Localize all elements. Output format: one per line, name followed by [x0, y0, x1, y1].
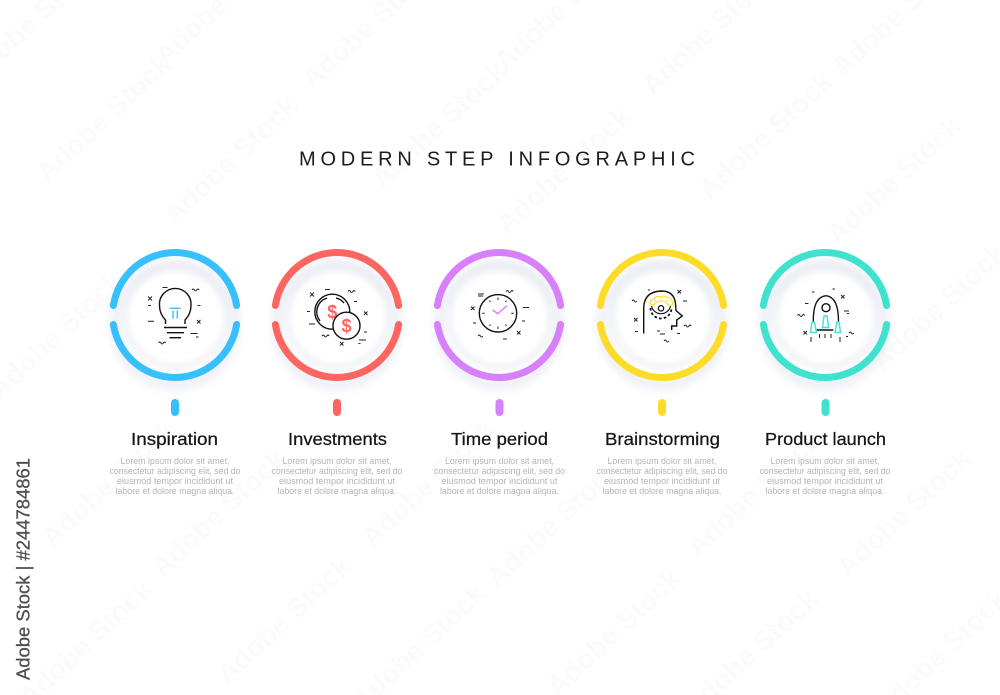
watermark pattern: Adobe Stock — [35, 413, 182, 553]
heading: Investments — [288, 429, 387, 449]
step 2: investments — [272, 253, 402, 496]
description: Lorem ipsum dolor sit amet, — [445, 455, 554, 466]
icon: head with gear — [632, 290, 691, 342]
description: labore et dolore magna aliqua. — [278, 485, 396, 496]
description: labore et dolore magna aliqua. — [116, 485, 234, 496]
heading: Inspiration — [131, 429, 218, 449]
description: eiusmod tempor incididunt ut — [442, 475, 558, 486]
stock id label: Adobe Stock | #244784861 — [12, 458, 34, 680]
step 4: brainstorming — [596, 253, 728, 496]
ring: yellow — [600, 253, 724, 377]
icon: light bulb — [148, 288, 200, 344]
description: consectetur adipiscing elit, sed do — [760, 465, 890, 476]
connector pill — [822, 399, 830, 416]
heading: Time period — [451, 429, 548, 449]
heading: Product launch — [765, 429, 886, 449]
dollar sign: large coin: $ — [327, 302, 337, 322]
heading: Brainstorming — [605, 429, 720, 449]
ring shadow — [277, 265, 397, 385]
description: labore et dolore magna aliqua. — [602, 485, 722, 496]
watermark pattern: Adobe Stock — [830, 443, 977, 583]
description: Lorem ipsum dolor sit amet, — [120, 455, 230, 466]
watermark pattern: Adobe Stock — [480, 453, 627, 593]
ring: purple — [437, 253, 561, 377]
description: labore et dolore magna aliqua. — [766, 485, 884, 496]
description: consectetur adipiscing elit, sed do — [272, 465, 402, 476]
ring: teal — [763, 253, 887, 377]
description: consectetur adipiscing elit, sed do — [110, 465, 240, 476]
gear — [652, 306, 670, 314]
title: MODERN STEP INFOGRAPHIC — [299, 148, 695, 170]
description: eiusmod tempor incididunt ut — [117, 475, 233, 486]
connector pill — [496, 399, 504, 416]
watermark pattern: Adobe Stock — [692, 65, 839, 205]
ring: red — [275, 253, 399, 377]
description: Lorem ipsum dolor sit amet, — [770, 455, 880, 466]
description — [596, 455, 728, 496]
icon: clock — [471, 290, 529, 339]
brain — [650, 296, 673, 305]
description: Lorem ipsum dolor sit amet, — [608, 455, 716, 466]
step 1: inspiration — [110, 253, 240, 496]
watermark pattern: Adobe Stock — [210, 550, 357, 690]
step 3: time period — [434, 253, 565, 496]
description: labore et dolore magna aliqua. — [440, 485, 559, 496]
watermark pattern: Adobe Stock — [30, 48, 177, 188]
description: eiusmod tempor incididunt ut — [279, 475, 395, 486]
step 5: product launch — [760, 253, 890, 496]
watermark pattern: Adobe Stock — [157, 90, 304, 230]
description — [110, 455, 240, 496]
dollar sign: small coin: $ — [341, 316, 352, 336]
watermark pattern: Adobe Stock — [490, 100, 637, 240]
icon: rocket — [798, 289, 854, 342]
watermark pattern: Adobe Stock — [680, 423, 827, 563]
description: eiusmod tempor incididunt ut — [604, 475, 720, 486]
ring shadow — [439, 265, 559, 385]
description: Lorem ipsum dolor sit amet, — [282, 455, 392, 466]
description — [434, 455, 565, 496]
ring shadow — [765, 265, 885, 385]
ring shadow — [115, 265, 235, 385]
connector pill — [171, 399, 179, 416]
ring shadow — [602, 265, 722, 385]
connector pill — [333, 399, 341, 416]
watermark pattern: Adobe Stock — [145, 443, 292, 583]
watermark pattern: Adobe Stock — [365, 55, 512, 195]
flames — [810, 316, 840, 332]
description: consectetur adipiscing elit, sed do — [596, 465, 728, 476]
description: consectetur adipiscing elit, sed do — [434, 465, 565, 476]
description — [272, 455, 402, 496]
icon: coins — [307, 290, 368, 346]
description: eiusmod tempor incididunt ut — [767, 475, 883, 486]
watermark pattern: Adobe Stock — [820, 110, 967, 250]
clock hands — [493, 306, 507, 314]
description — [760, 455, 890, 496]
connector pill — [658, 399, 666, 416]
watermark pattern: Adobe Stock — [355, 413, 502, 553]
ring: blue — [113, 253, 237, 377]
